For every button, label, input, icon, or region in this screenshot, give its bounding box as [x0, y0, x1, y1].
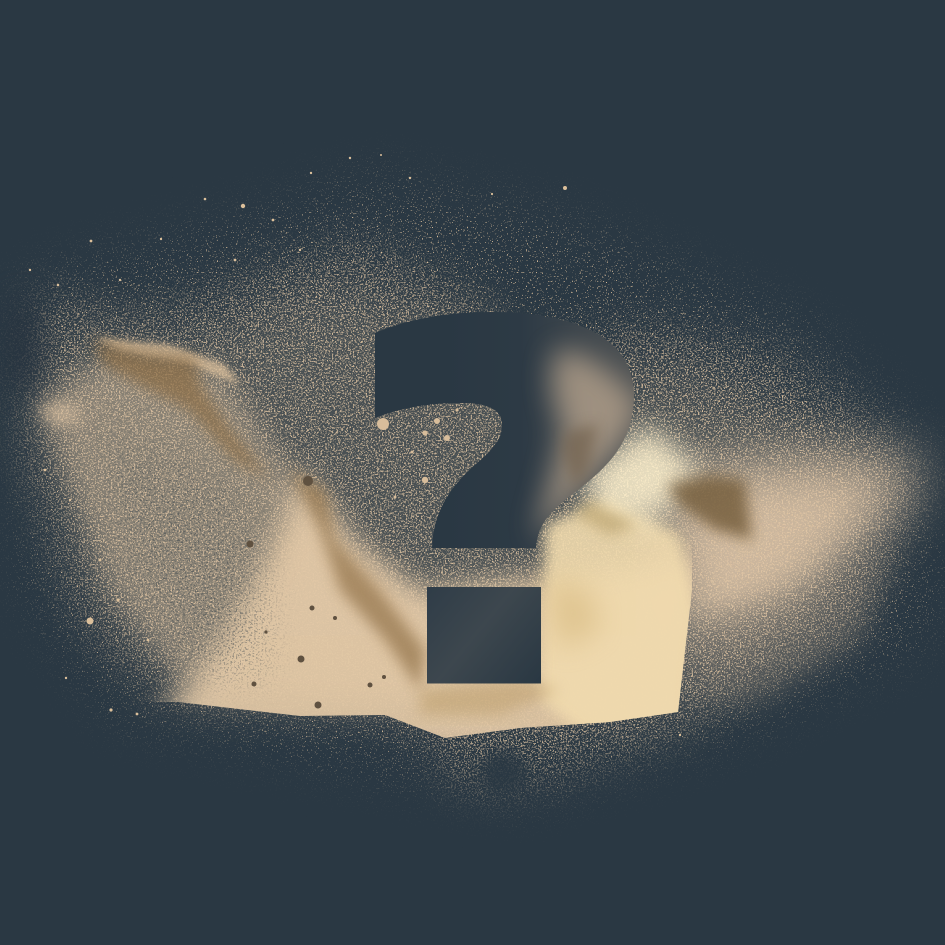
dust: scattered large particles — [29, 154, 681, 736]
dust: main bright body — [35, 338, 700, 760]
dust: dark speckle over body — [100, 430, 270, 680]
question mark: dot — [427, 587, 541, 684]
dust: fine outer grain — [25, 180, 925, 795]
illustration: dust explosion with question mark — [0, 144, 945, 832]
dust: dark rock fragments — [246, 476, 386, 708]
dust: darker ochre streaks — [92, 340, 752, 715]
dust: yellow right body — [540, 495, 700, 740]
question mark: small stones over hook edge — [377, 408, 459, 498]
question mark: dust visible inside hook — [535, 349, 640, 540]
dust: particle grain — [25, 240, 925, 790]
question mark: hook — [375, 312, 640, 548]
dust: bottom shadow smudges — [2, 295, 527, 794]
dust: soft left body — [150, 470, 700, 760]
dust: soft haze — [40, 285, 925, 715]
